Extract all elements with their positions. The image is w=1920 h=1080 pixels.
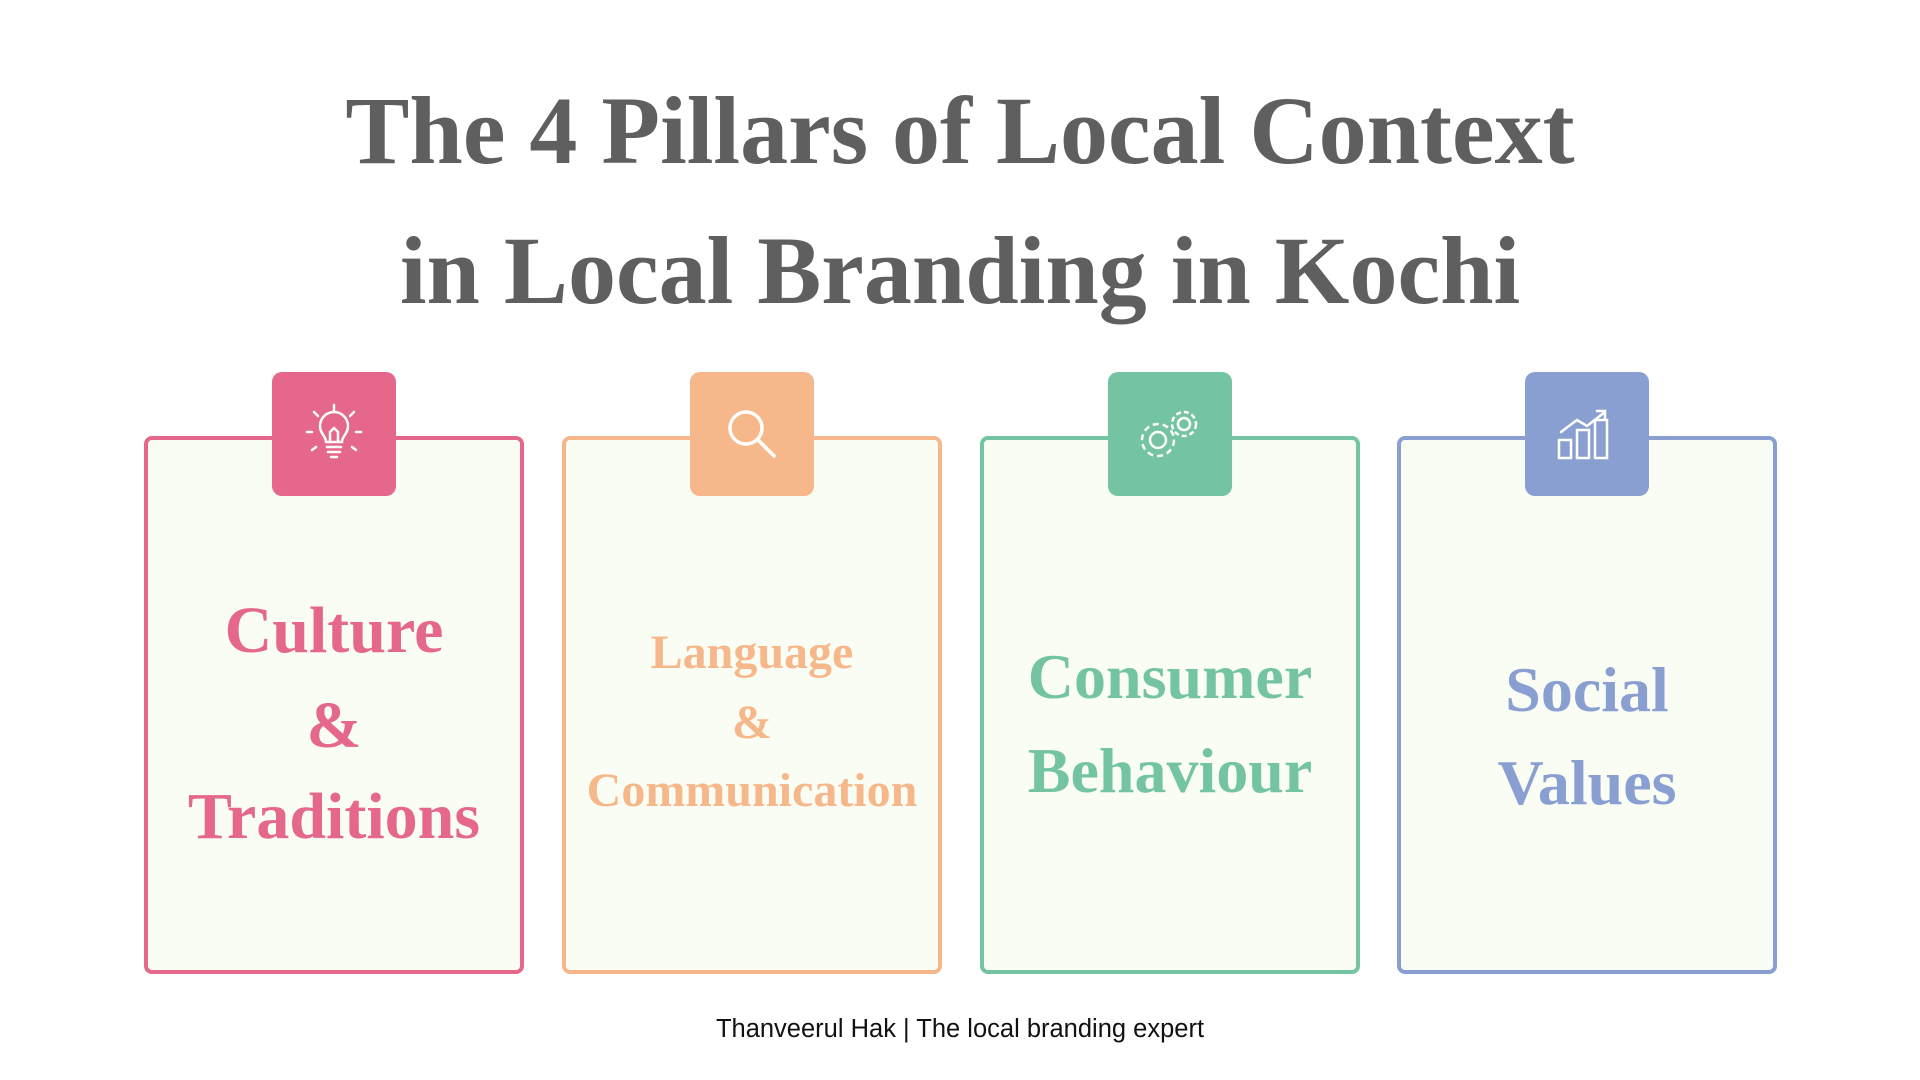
panel: language & communication: Communication [587, 764, 917, 817]
title: in Local Branding in Kochi [400, 217, 1520, 324]
title [345, 77, 1575, 324]
title: The 4 Pillars of Local Context [345, 77, 1575, 184]
panel: culture & traditions: Culture [225, 594, 443, 667]
icon: magnifier [690, 372, 814, 496]
icon: gears [1108, 372, 1232, 496]
panel: language & communication: Language [651, 626, 853, 679]
icon: light bulb [272, 372, 396, 496]
panel: culture & traditions [144, 436, 524, 974]
panel: consumer behaviour: Behaviour [1028, 735, 1312, 806]
panel: social values: Social [1505, 654, 1669, 725]
panel: consumer behaviour: Consumer [1028, 641, 1312, 712]
panel: consumer behaviour [980, 436, 1360, 974]
footer credit: Thanveerul Hak | The local branding expert [716, 1015, 1204, 1043]
panel: culture & traditions: Traditions [188, 780, 480, 853]
panel: social values: Values [1497, 747, 1677, 818]
icon: bar chart [1525, 372, 1649, 496]
panel: language & communication: & [732, 696, 772, 749]
panel: language & communication [562, 436, 942, 974]
panel: social values [1397, 436, 1777, 974]
panel: culture & traditions: & [306, 689, 361, 762]
